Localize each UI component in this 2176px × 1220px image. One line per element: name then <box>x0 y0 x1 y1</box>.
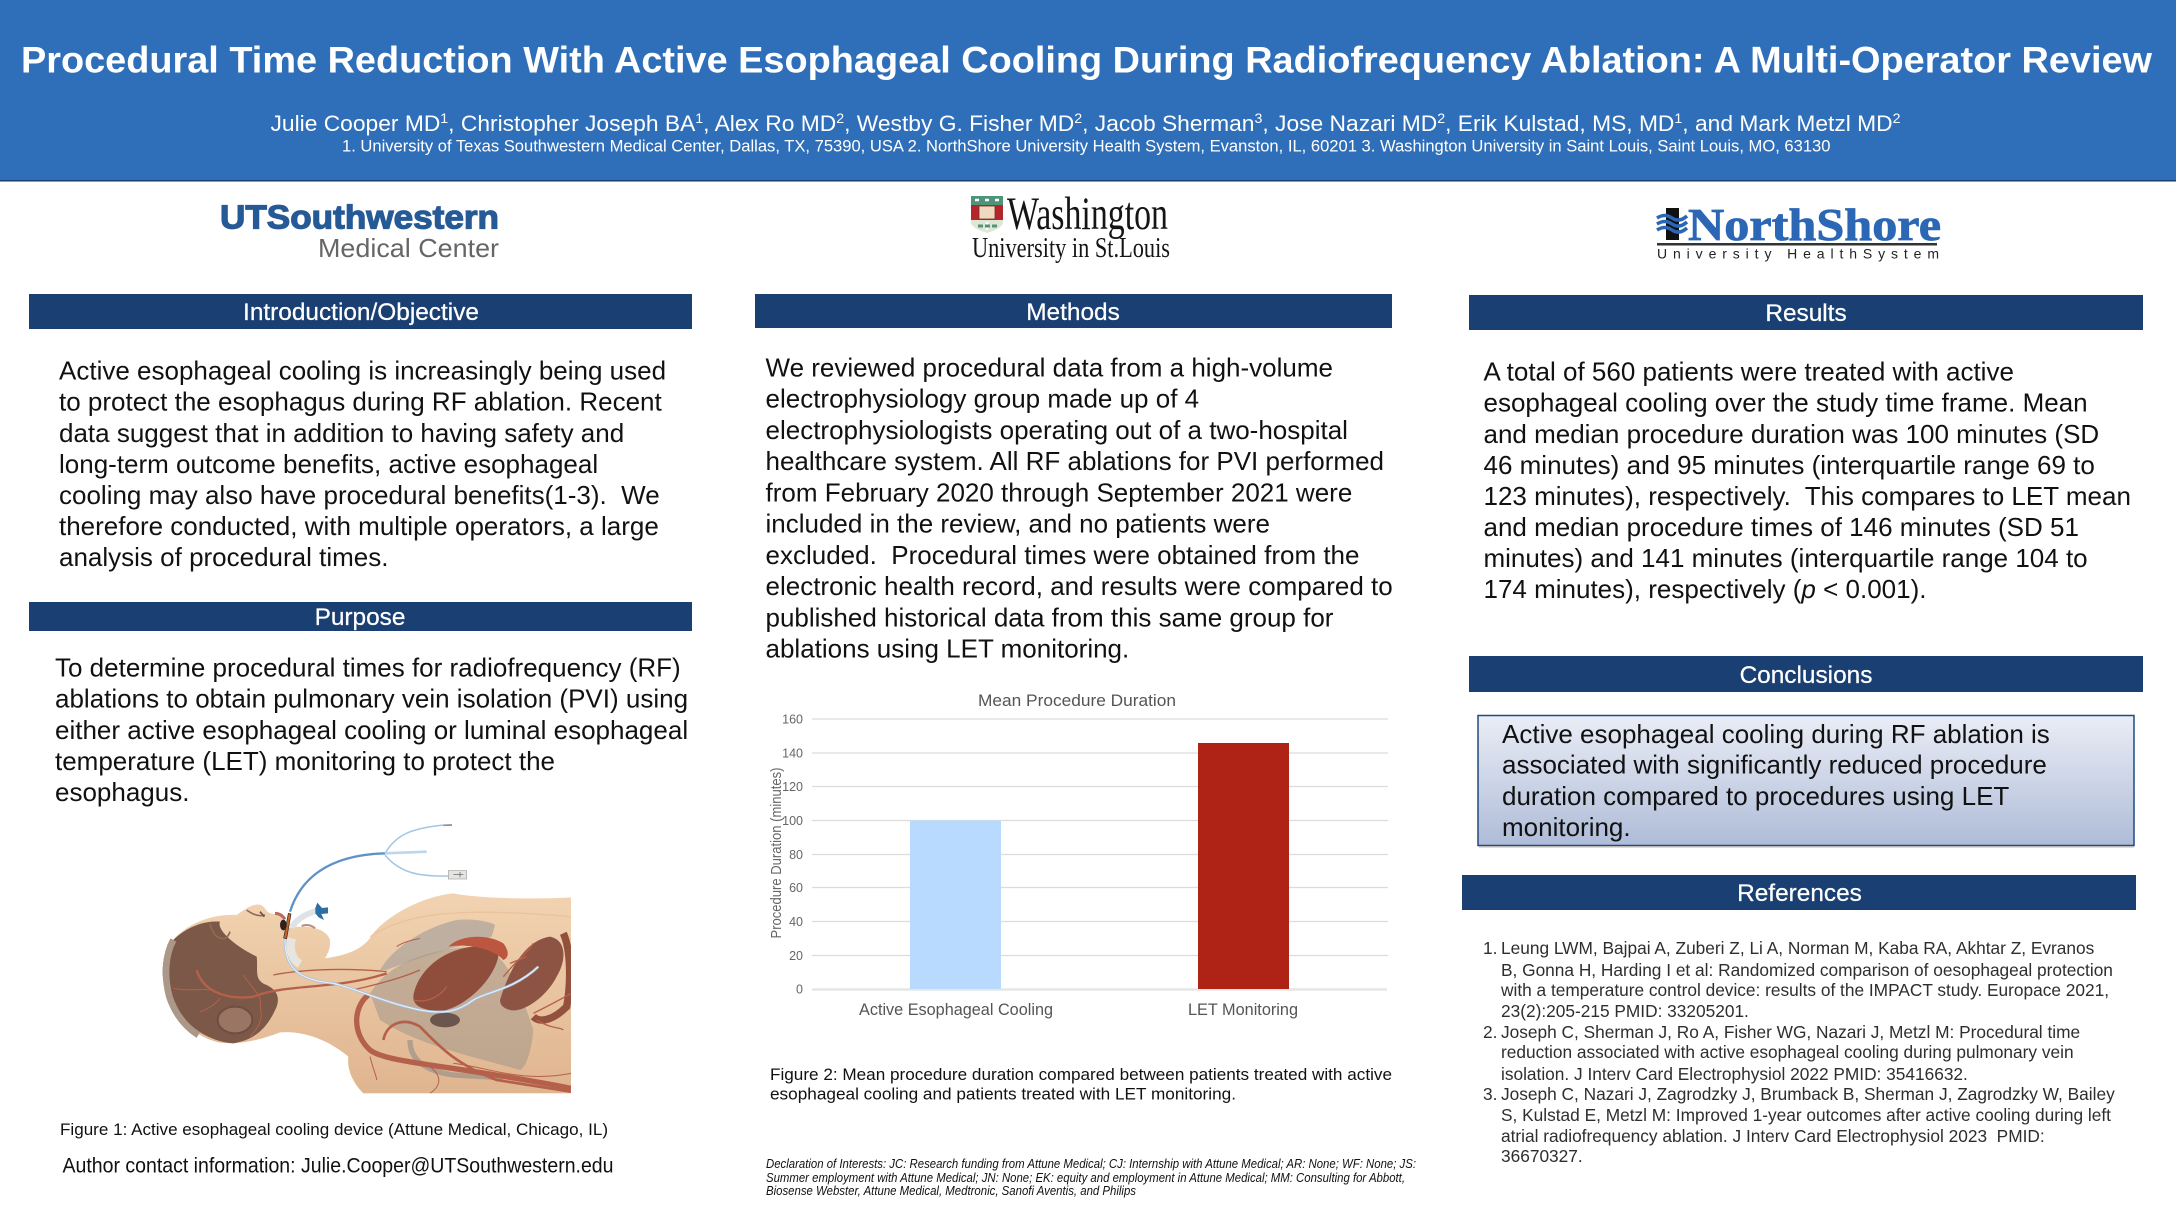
text block: results: and median procedure duration was 100 minutes (SD <box>1484 419 2099 449</box>
authors: 1 <box>1674 110 1683 126</box>
text block: purpose: esophagus. <box>55 777 189 807</box>
figure 2 caption <box>770 1065 1392 1104</box>
bar chart: mean procedure duration <box>768 691 1388 1019</box>
logo: Washington University: Washington <box>1007 188 1168 240</box>
conclusions callout box: associated with significantly reduced procedure <box>1502 750 2047 780</box>
declaration of interests: Declaration of Interests: JC: Research funding from Attune Medical; CJ: Internship with Attune Medical; AR: None; WF: None; JS: <box>766 1157 1416 1171</box>
text block: methods: included in the review, and no patients were <box>766 508 1270 538</box>
references list: S, Kulstad E, Metzl M: Improved 1-year outcomes after active cooling during left <box>1501 1105 2111 1125</box>
heading: Methods: Methods <box>1026 299 1120 326</box>
header banner <box>0 0 2176 182</box>
y axis ticks: 40 <box>789 915 803 929</box>
authors: 2 <box>1893 110 1901 126</box>
text block: results: and median procedure times of 146 minutes (SD 51 <box>1484 512 2079 542</box>
logo: UT Southwestern: UTSouthwestern <box>220 198 499 236</box>
references list: isolation. J Interv Card Electrophysiol 2022 PMID: 35416632. <box>1501 1064 1968 1084</box>
heading: Results: Results <box>1765 300 1847 327</box>
text block: introduction <box>59 356 666 572</box>
text block: methods: electrophysiology group made up of 4 <box>766 384 1199 414</box>
references list: 23(2):205-215 PMID: 33205201. <box>1501 1001 1749 1021</box>
references list: B, Gonna H, Harding I et al: Randomized comparison of oesophageal protection <box>1501 960 2113 980</box>
references list: with a temperature control device: results of the IMPACT study. Europace 2021, <box>1500 980 2109 1000</box>
ear <box>218 1007 252 1033</box>
text block: methods: ablations using LET monitoring. <box>766 634 1129 664</box>
figure 2 caption: esophageal cooling and patients treated with LET monitoring. <box>770 1084 1236 1104</box>
bar: active esophageal cooling <box>910 820 1001 989</box>
references list <box>1483 938 2115 1166</box>
text block: methods: electronic health record, and results were compared to <box>766 571 1393 601</box>
declaration of interests: Biosense Webster, Attune Medical, Medtronic, Sanofi Aventis, and Philips <box>766 1184 1136 1198</box>
logo: NorthShore: NorthShore <box>1688 199 1941 250</box>
patient body <box>163 893 571 1093</box>
y axis ticks: 160 <box>782 712 803 726</box>
references list: Joseph C, Nazari J, Zagrodzky J, Brumback B, Sherman J, Zagrodzky W, Bailey <box>1501 1084 2115 1104</box>
text block: purpose: To determine procedural times for radiofrequency (RF) <box>55 652 681 682</box>
authors: 1 <box>695 110 703 126</box>
upper lung <box>380 920 495 970</box>
y axis ticks: 0 <box>796 982 803 996</box>
logo: Washington University: University in St.Louis <box>972 233 1170 264</box>
authors: 1 <box>440 110 448 126</box>
heading: Purpose <box>29 602 692 631</box>
text block: purpose: either active esophageal cooling or luminal esophageal <box>55 715 688 745</box>
text block: results <box>1484 356 2131 604</box>
logo: NorthShore <box>1657 199 1941 262</box>
heading: Conclusions <box>1469 656 2143 692</box>
references list: Joseph C, Sherman J, Ro A, Fisher WG, Nazari J, Metzl M: Procedural time <box>1501 1022 2080 1042</box>
heading: Introduction/Objective <box>29 294 692 329</box>
text block: results: esophageal cooling over the study time frame. Mean <box>1484 388 2088 418</box>
authors: Julie Cooper MD <box>270 111 438 136</box>
text block: introduction: data suggest that in addition to having safety and <box>59 418 624 448</box>
y axis ticks: 140 <box>782 746 803 760</box>
declaration of interests <box>766 1157 1416 1198</box>
affiliations: 1. University of Texas Southwestern Medical Center, Dallas, TX, 75390, USA 2. NorthShore University Health System, Evanston, IL, 60201 3. Washington University in Saint Louis, Saint Louis, MO, 63130 <box>342 138 1830 156</box>
logo: UT Southwestern <box>220 198 499 263</box>
author contact: Author contact information: Julie.Cooper@UTSouthwestern.edu <box>62 1154 614 1178</box>
logo: NorthShore: University HealthSystem <box>1657 246 1939 262</box>
y axis ticks: 60 <box>789 881 803 895</box>
y axis ticks: 20 <box>789 949 803 963</box>
text block: purpose <box>55 652 688 807</box>
conclusions callout box <box>1478 716 2134 848</box>
heading: References <box>1462 875 2136 910</box>
text block: results: 123 minutes), respectively. This compares to LET mean <box>1484 481 2131 511</box>
references list: atrial radiofrequency ablation. J Interv Card Electrophysiol 2023 PMID: <box>1501 1126 2045 1146</box>
conclusions callout box: monitoring. <box>1502 812 1631 842</box>
heading: References: References <box>1737 880 1862 907</box>
authors: , Alex Ro MD <box>703 111 836 136</box>
text block: methods: We reviewed procedural data from a high-volume <box>766 352 1333 382</box>
heading: Results <box>1469 295 2143 330</box>
references list: 2. <box>1483 1022 1497 1042</box>
references list: 3. <box>1483 1084 1497 1104</box>
heading: Conclusions: Conclusions <box>1740 662 1872 689</box>
text block: results: A total of 560 patients were treated with active <box>1484 356 2014 386</box>
authors: , Erik Kulstad, MS, MD <box>1445 111 1674 136</box>
text block: introduction: therefore conducted, with multiple operators, a large <box>59 511 659 541</box>
text block: introduction: analysis of procedural times. <box>59 542 388 572</box>
conclusions callout box: duration compared to procedures using LET <box>1502 781 2009 811</box>
heading: Purpose: Purpose <box>315 604 405 631</box>
text block: purpose: ablations to obtain pulmonary vein isolation (PVI) using <box>55 684 688 714</box>
declaration of interests: Summer employment with Attune Medical; JN: None; EK: equity and employment in Attune Medical; MM: Consulting for Abbott, <box>766 1171 1405 1185</box>
category labels <box>859 1001 1298 1019</box>
text block: methods <box>766 352 1393 664</box>
chart title: Mean Procedure Duration <box>978 691 1176 710</box>
cooling device catheter <box>285 940 538 1012</box>
authors: , Jose Nazari MD <box>1262 111 1437 136</box>
text block: methods: healthcare system. All RF ablations for PVI performed <box>766 446 1384 476</box>
figure 2 caption: Figure 2: Mean procedure duration compared between patients treated with active <box>770 1065 1392 1084</box>
logo: Washington University <box>971 188 1170 264</box>
lower lung <box>370 947 533 1070</box>
figure 1 caption: Figure 1: Active esophageal cooling device (Attune Medical, Chicago, IL) <box>60 1121 608 1139</box>
category labels: LET Monitoring <box>1188 1001 1298 1019</box>
figure 1: esophageal cooling device illustration <box>163 825 571 1093</box>
y axis ticks: 80 <box>789 848 803 862</box>
y axis ticks: 100 <box>782 814 803 828</box>
logo: UT Southwestern: Medical Center <box>318 233 499 263</box>
category labels: Active Esophageal Cooling <box>859 1001 1053 1019</box>
text block: methods: published historical data from this same group for <box>766 602 1334 632</box>
authors: , and Mark Metzl MD <box>1682 111 1893 136</box>
authors: , Westby G. Fisher MD <box>844 111 1074 136</box>
text block: results: 174 minutes), respectively (p < 0.001). <box>1484 574 1926 604</box>
authors: 3 <box>1254 110 1263 126</box>
references list: 1. <box>1483 938 1497 958</box>
authors: 2 <box>1074 110 1082 126</box>
title: Procedural Time Reduction With Active Esophageal Cooling During Radiofrequency Ablation: A Multi-Operator Review <box>21 38 2153 80</box>
references list: reduction associated with active esophageal cooling during pulmonary vein <box>1501 1042 2074 1062</box>
text block: introduction: to protect the esophagus during RF ablation. Recent <box>59 386 662 416</box>
stomach <box>500 937 563 1010</box>
authors: , Christopher Joseph BA <box>448 111 695 136</box>
bar: LET monitoring <box>1198 743 1289 989</box>
y axis ticks <box>782 712 803 996</box>
text block: results: 46 minutes) and 95 minutes (interquartile range 69 to <box>1484 450 2095 480</box>
airway and bite block <box>291 938 300 964</box>
tube and branches <box>290 825 452 912</box>
text block: introduction: Active esophageal cooling is increasingly being used <box>59 356 666 386</box>
authors: 2 <box>1437 110 1445 126</box>
authors: 2 <box>836 110 844 126</box>
authors: , Jacob Sherman <box>1082 111 1254 136</box>
references list: 36670327. <box>1501 1146 1583 1166</box>
icon: shield <box>971 196 1003 233</box>
text block: methods: from February 2020 through September 2021 were <box>766 478 1352 508</box>
hair <box>163 921 278 1043</box>
y axis title: Procedure Duration (minutes) <box>768 768 785 938</box>
icon: cross and waves <box>1657 208 1687 240</box>
text block: purpose: temperature (LET) monitoring to protect the <box>55 746 555 776</box>
heart <box>413 946 498 1012</box>
heading: Methods <box>755 294 1392 328</box>
text block: methods: excluded. Procedural times were obtained from the <box>766 540 1359 570</box>
text block: introduction: long-term outcome benefits, active esophageal <box>59 449 598 479</box>
conclusions callout box: Active esophageal cooling during RF ablation is <box>1502 719 2050 749</box>
text block: methods: electrophysiologists operating out of a two-hospital <box>766 415 1348 445</box>
heading: Introduction/Objective: Introduction/Objective <box>243 299 479 326</box>
text block: introduction: cooling may also have procedural benefits(1-3). We <box>59 480 660 510</box>
text block: results: minutes) and 141 minutes (interquartile range 104 to <box>1484 543 2088 573</box>
arteries <box>173 938 571 1093</box>
references list: Leung LWM, Bajpai A, Zuberi Z, Li A, Norman M, Kaba RA, Akhtar Z, Evranos <box>1501 938 2095 958</box>
y axis ticks: 120 <box>782 780 803 794</box>
